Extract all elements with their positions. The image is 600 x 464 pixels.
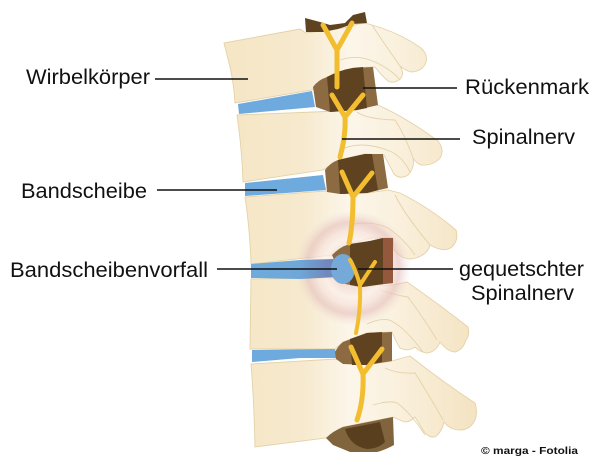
label: Bandscheibe: Bandscheibe (21, 180, 147, 203)
label: Spinalnerv: Spinalnerv (472, 126, 576, 149)
herniated disc (251, 259, 338, 279)
label: gequetschter Spinalnerv: gequetschter (459, 258, 584, 281)
label: Bandscheibenvorfall: Bandscheibenvorfall (10, 259, 208, 282)
label: Wirbelkörper: Wirbelkörper (26, 66, 150, 89)
nerves (323, 23, 382, 420)
vertebral canal segments (305, 12, 394, 452)
label: gequetschter Spinalnerv (459, 258, 584, 305)
herniated disc bulge (331, 254, 355, 284)
intervertebral discs (238, 91, 337, 362)
leader lines (155, 79, 460, 269)
inflammation glow around herniated disc (295, 210, 411, 326)
credit: © marga - Fotolia (481, 446, 579, 457)
label: Rückenmark: Rückenmark (465, 76, 590, 99)
vertebral bodies with spinous processes (224, 23, 476, 447)
label: gequetschter Spinalnerv: Spinalnerv (471, 282, 575, 305)
